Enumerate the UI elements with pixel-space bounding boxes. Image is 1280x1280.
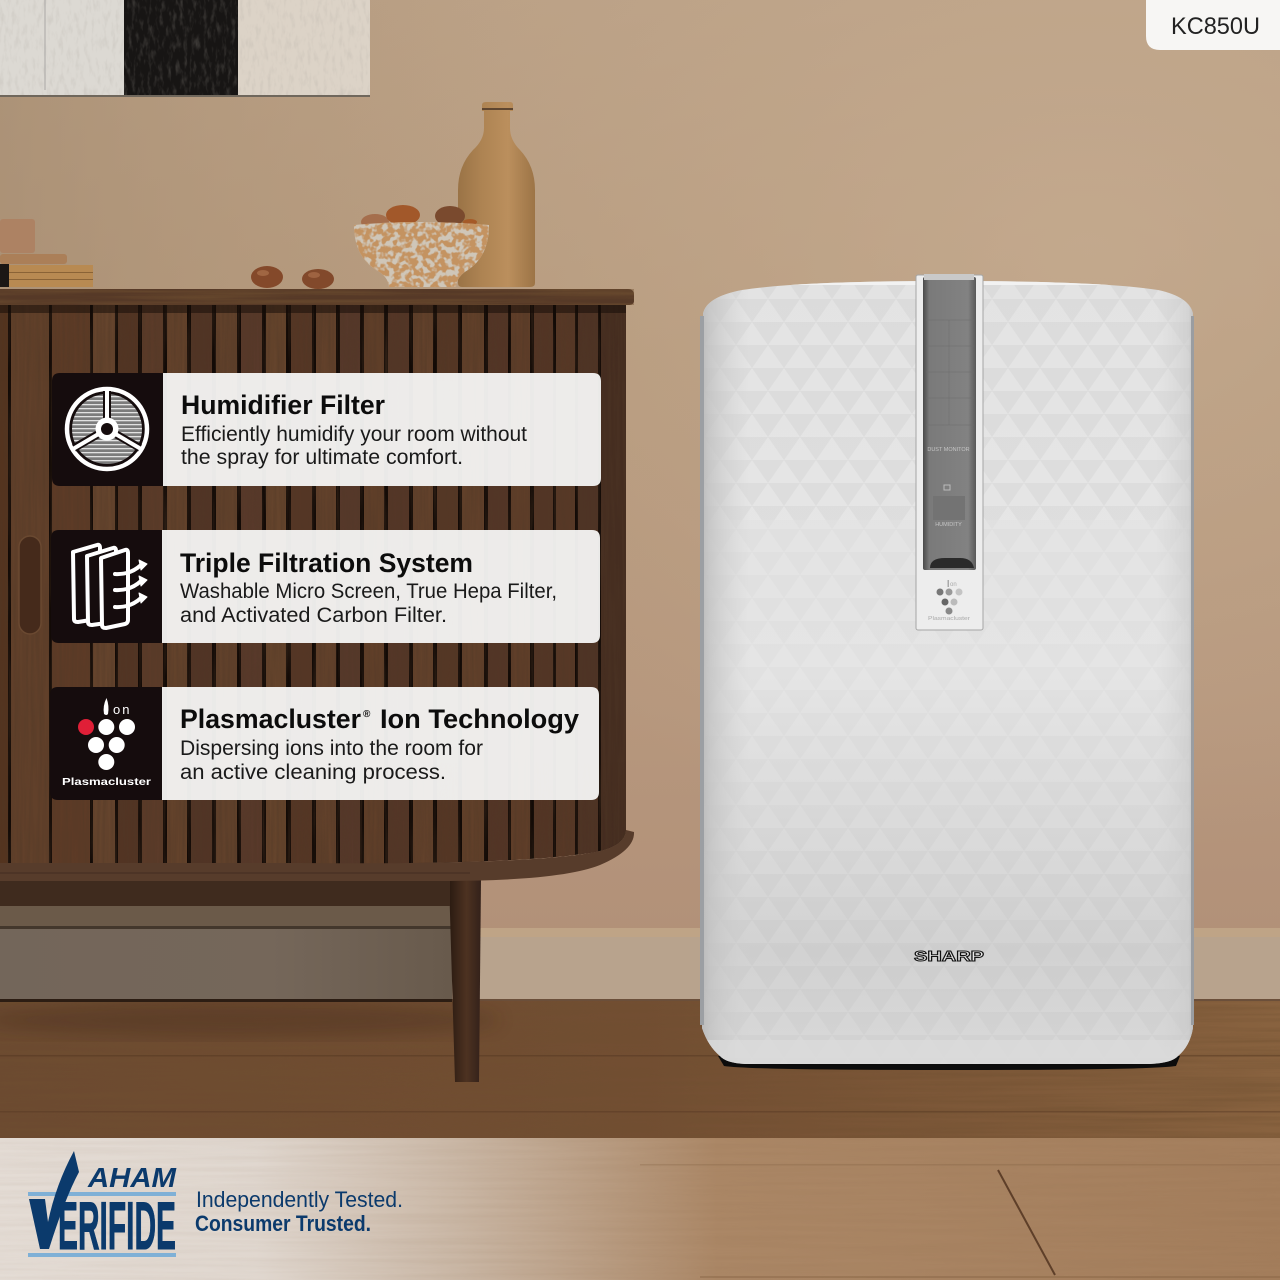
model tag: KC850U [1171,13,1260,40]
floor plank joint [998,1170,1055,1275]
check mark V [29,1151,79,1249]
tagline: Independently Tested. [196,1187,403,1212]
air purifier product [700,274,1196,1070]
side trim [700,316,704,1025]
icon: humidifier wheel [67,389,147,469]
cabinet leg [449,880,481,1082]
slatted front [0,305,626,865]
card icon panel [52,373,163,486]
card heading: Ion Technology [380,704,579,734]
feature card: humidifier filter [52,373,601,486]
card text panel [162,530,600,643]
skirting board [450,928,1280,1001]
speckled bowl [354,222,489,287]
tagline: Consumer Trusted. [195,1211,371,1236]
panel plasmacluster mark: Plasmacluster [928,616,970,622]
card description: and Activated Carbon Filter. [180,604,447,627]
AHAM Verifide logo [28,1151,177,1264]
card description: an active cleaning process. [180,761,446,784]
cabinet [0,289,634,1082]
bottom slab [0,830,634,881]
display window [923,277,976,570]
feature card: triple filtration [51,530,600,643]
control panel: DUST MONITOR [927,447,970,453]
card description: Efficiently humidify your room without [181,423,527,446]
bottom banner [0,1138,1280,1280]
wood floor [0,1001,1280,1138]
wall painting [0,0,370,97]
card description: Dispersing ions into the room for [180,737,483,760]
ceramic bottle [458,102,535,287]
card text panel [163,373,601,486]
card description [180,580,557,627]
feature card: plasmacluster [50,687,599,800]
card text panel [162,687,599,800]
card description [180,737,483,784]
bottom banner: ERIFIDE [58,1188,176,1264]
card heading: ® [363,709,371,720]
under rail [0,880,450,906]
loose nuts [251,266,334,289]
card heading: Triple Filtration System [180,548,473,578]
control panel: HUMIDITY [935,522,962,528]
card icon panel [50,687,162,800]
panel plasmacluster mark: on [950,582,957,588]
background wall [0,0,1280,1005]
under-cabinet shadow wall [0,880,452,930]
card description: Washable Micro Screen, True Hepa Filter, [180,580,557,603]
card description: the spray for ultimate comfort. [181,446,463,469]
icon: plasmacluster logo: on [113,702,131,717]
SHARP logo: SHARP [914,948,984,965]
icon: three filters with arrows [73,545,147,628]
card heading: Plasmacluster [180,704,361,734]
icon: plasmacluster logo [62,698,151,788]
card heading [180,704,579,734]
books [0,219,93,287]
panel plasmacluster mark [928,580,970,622]
nuts in bowl [361,205,477,230]
tagline [195,1187,403,1236]
top slab [0,289,634,305]
card icon panel [51,530,162,643]
AHAM Verifide logo: AHAM [87,1162,177,1193]
product base shadow [718,1056,1180,1070]
card description [181,423,527,469]
control panel [916,274,983,630]
icon: plasmacluster logo: Plasmacluster [62,777,151,788]
door finger pull [19,536,41,634]
under-cabinet skirting [0,928,452,1000]
card heading: Humidifier Filter [181,390,385,420]
product body [700,280,1196,1070]
model tag [1146,0,1280,50]
